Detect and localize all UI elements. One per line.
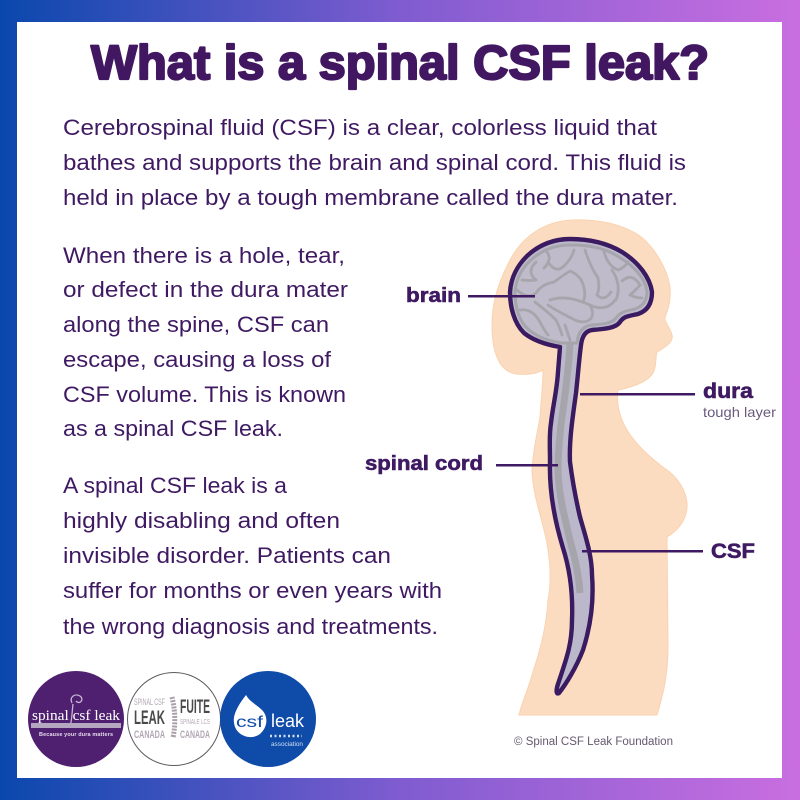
logo: Spinal CSF Leak Canada: CANADA <box>180 729 210 741</box>
paragraph: what a leak is <box>63 243 349 441</box>
label: CSF: CSF <box>711 540 755 563</box>
intro paragraph: Cerebrospinal fluid (CSF) is a clear, colorless liquid that <box>63 115 658 140</box>
logo: CSF Leak Association: leak <box>271 711 305 731</box>
dura and CSF outline <box>510 239 652 693</box>
logo: Spinal CSF Leak Canada <box>128 672 220 766</box>
logo: CSF Leak Association: csf <box>236 714 264 731</box>
title: What is a spinal CSF leak? <box>91 37 709 90</box>
copyright: © Spinal CSF Leak Foundation <box>514 736 673 748</box>
paragraph: what a leak is: escape, causing a loss of <box>63 347 332 372</box>
paragraph: impact: the wrong diagnosis and treatments. <box>63 614 438 639</box>
paragraph: what a leak is: along the spine, CSF can <box>63 312 329 337</box>
logo: Spinal CSF Leak Canada: FUITE <box>180 697 210 718</box>
label: dura: dura <box>703 380 753 403</box>
brain <box>515 245 647 343</box>
paragraph: what a leak is: CSF volume. This is known <box>63 382 346 407</box>
paragraph: impact: suffer for months or even years with <box>63 578 442 603</box>
intro paragraph: bathes and supports the brain and spinal cord. This fluid is <box>63 150 686 175</box>
paragraph: what a leak is: or defect in the dura mater <box>63 277 349 302</box>
logo: CSF Leak Association <box>220 671 316 767</box>
label: spinal cord: spinal cord <box>365 453 483 475</box>
paragraph: impact <box>63 473 442 639</box>
paragraph: what a leak is: When there is a hole, tear, <box>63 243 345 268</box>
label: dura <box>580 380 776 420</box>
paragraph: impact: invisible disorder. Patients can <box>63 543 391 568</box>
intro paragraph: held in place by a tough membrane called the dura mater. <box>63 185 678 210</box>
logo: Spinal CSF Leak Canada: SPINAL CSF <box>134 697 165 707</box>
logo: Spinal CSF Leak Foundation: spinal csf leak <box>32 708 121 724</box>
logo: Spinal CSF Leak Canada: SPINALE LCS <box>180 717 210 726</box>
paragraph: impact: A spinal CSF leak is a <box>63 473 287 498</box>
anatomy diagram <box>492 220 687 715</box>
logo: Spinal CSF Leak Foundation: Because your dura matters <box>39 732 113 738</box>
spinal cord <box>558 343 580 593</box>
paragraph: impact: highly disabling and often <box>63 508 340 533</box>
intro paragraph <box>63 115 686 210</box>
label: brain <box>406 285 535 307</box>
logo: CSF Leak Association: association <box>271 741 303 748</box>
logo: Spinal CSF Leak Canada: CANADA <box>134 729 165 741</box>
body silhouette <box>492 220 687 715</box>
logo: Spinal CSF Leak Canada: LEAK <box>134 708 165 729</box>
label: dura: tough layer <box>703 404 776 420</box>
logo: Spinal CSF Leak Foundation <box>28 671 124 767</box>
paragraph: what a leak is: as a spinal CSF leak. <box>63 416 283 441</box>
label: brain: brain <box>406 285 461 307</box>
